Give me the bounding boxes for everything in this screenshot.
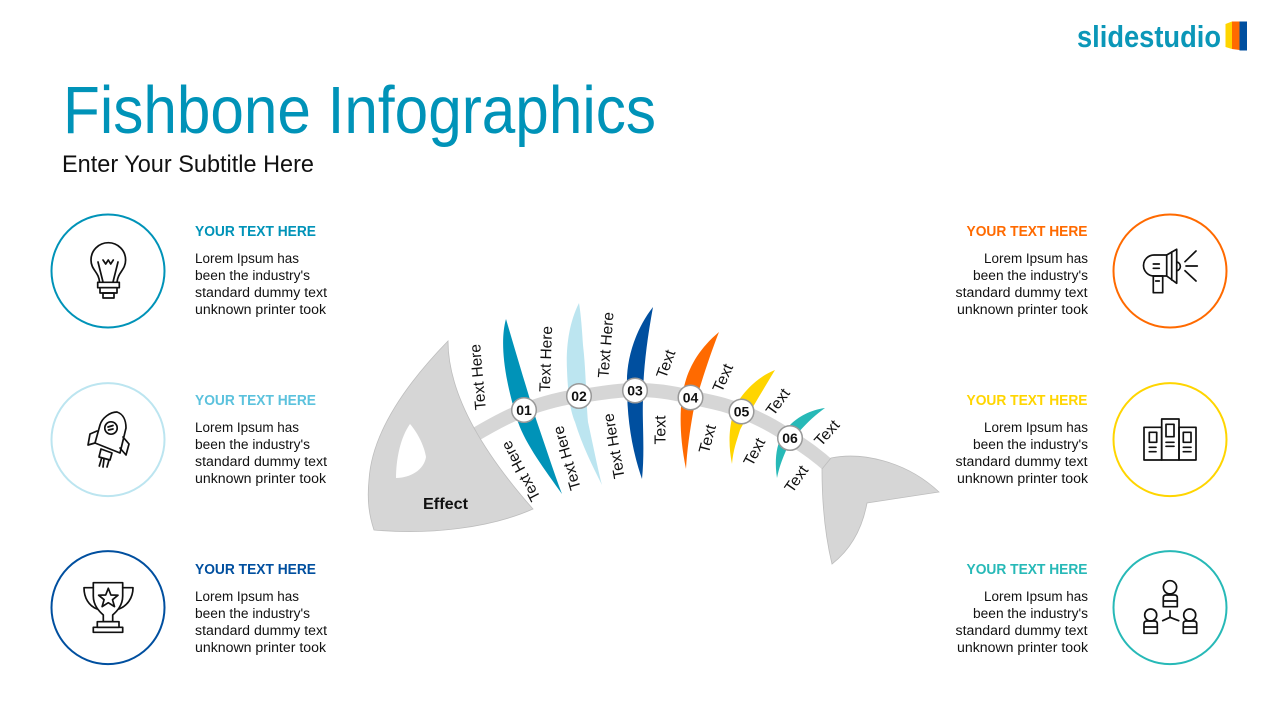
bone labels: upper: Text Here [537,326,556,392]
bone labels: upper: Text Here [595,311,618,379]
body text [956,251,1088,317]
icon: buildings [1144,419,1196,460]
bone labels: lower: Text Here [498,438,544,504]
bone labels: lower: Text [741,435,770,469]
heading: YOUR TEXT HERE [966,224,1088,240]
heading: YOUR TEXT HERE [195,562,316,578]
circle: idea [52,214,164,328]
body text: standard dummy text [956,454,1088,469]
body text: been the industry's [195,437,310,452]
node: 05 [729,399,754,424]
fish eye [396,424,426,478]
body text: Lorem Ipsum has [984,420,1088,435]
bone labels: lower: Text [652,415,670,445]
body text: Lorem Ipsum has [195,420,299,435]
body text: unknown printer took [195,640,326,655]
heading: YOUR TEXT HERE [195,393,316,409]
body text: standard dummy text [195,454,327,469]
body text: unknown printer took [957,640,1088,655]
panel: item 6 right [956,551,1226,664]
bone labels: lower [498,412,813,504]
heading: YOUR TEXT HERE [966,562,1088,578]
bone labels: upper: Text [763,385,794,419]
body text: unknown printer took [195,302,326,317]
body text: been the industry's [973,268,1088,283]
circle: launch [52,383,164,496]
subtitle: Enter Your Subtitle Here [62,151,314,178]
body text: standard dummy text [195,623,327,638]
body text: Lorem Ipsum has [984,589,1088,604]
circle: trophy [52,551,164,664]
panel: item 1 left [52,214,327,328]
panel: item 3 left [52,551,327,664]
fish bone: 03 [627,307,653,479]
bone labels: upper: Text [811,416,844,450]
icon: team [1144,581,1197,633]
body text [956,589,1088,655]
fish spine [473,390,830,467]
body text: standard dummy text [956,285,1088,300]
node: 04: 04 [683,390,698,406]
body text [956,420,1088,486]
fishbone diagram [368,303,939,564]
fish tail [822,456,939,564]
fish head [368,341,533,532]
node: 06: 06 [782,430,798,446]
body text: Lorem Ipsum has [195,589,299,604]
fish bone: 04 [681,332,719,469]
body text: Lorem Ipsum has [984,251,1088,266]
circle: megaphone [1114,214,1226,328]
icon: trophy [84,583,133,632]
fish bone: 06 [776,408,825,478]
body text: been the industry's [195,268,310,283]
bone labels: lower: Text Here [600,412,629,480]
title: Fishbone Infographics [63,73,656,148]
node: 03 [623,378,647,403]
body text: Lorem Ipsum has [195,251,299,266]
body text: unknown printer took [957,471,1088,486]
panel: item 2 left [52,383,327,496]
node: 04 [678,385,703,410]
body text: been the industry's [973,437,1088,452]
bone labels: upper: Text [710,361,737,395]
heading: YOUR TEXT HERE [966,393,1088,409]
fish bone: 02 [567,303,602,485]
node: 02 [567,384,591,408]
body text [195,420,327,486]
body text: unknown printer took [957,302,1088,317]
circle: buildings [1114,383,1226,496]
node: 03: 03 [627,382,643,398]
logo: slidestudio: slidestudio [1077,19,1221,54]
node: 06 [778,426,802,450]
body text: standard dummy text [195,285,327,300]
label: effect: Effect [423,496,468,513]
body text [195,251,327,317]
panel: item 4 right [956,214,1226,328]
panel: item 5 right [956,383,1226,496]
body text: been the industry's [973,606,1088,621]
body text: unknown printer took [195,471,326,486]
icon: light bulb [91,243,126,298]
body text [195,589,327,655]
bone labels: lower: Text Here [550,424,585,492]
body text: standard dummy text [956,623,1088,638]
bone labels: lower: Text [696,422,720,455]
icon: rocket [88,412,129,467]
heading: YOUR TEXT HERE [195,224,316,240]
icon: megaphone [1144,249,1197,293]
fish bone: 05 [730,370,775,464]
bone labels: upper [467,311,844,450]
bone labels: upper: Text Here [467,343,490,411]
bone labels: lower: Text [782,462,813,496]
bone labels: upper: Text [654,347,680,381]
node: 05: 05 [734,404,749,420]
circle: team [1114,551,1226,664]
node: 01 [512,398,536,422]
node: 01: 01 [516,402,532,418]
node: 02: 02 [571,388,587,404]
body text: been the industry's [195,606,310,621]
fish bone: 01 [503,319,562,494]
